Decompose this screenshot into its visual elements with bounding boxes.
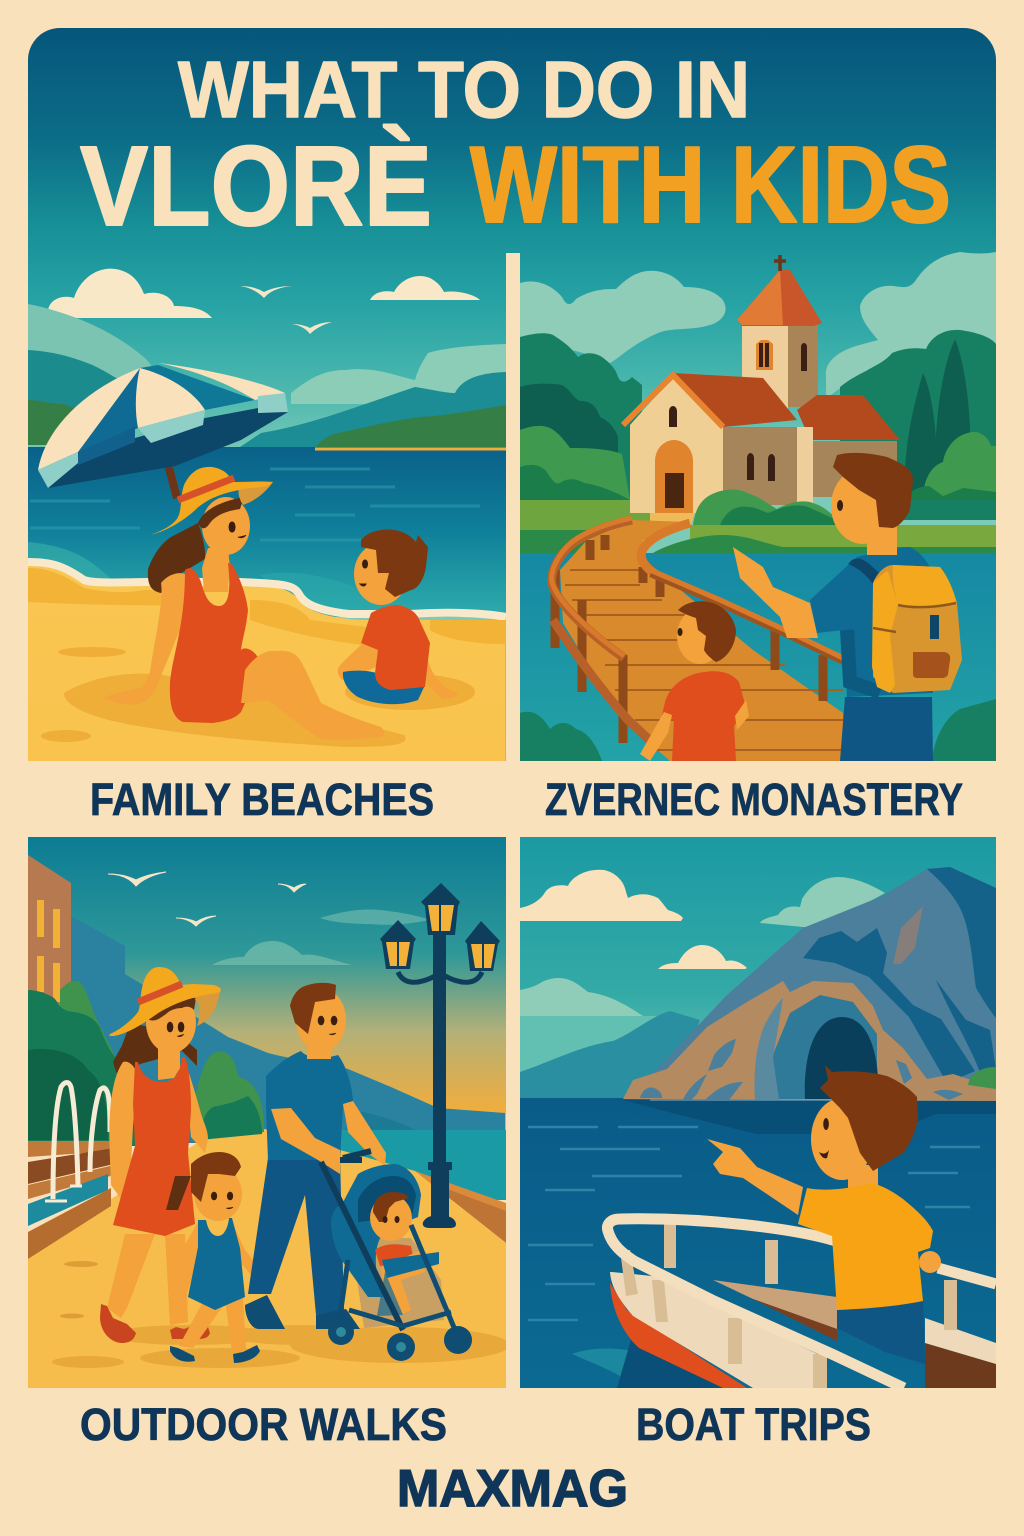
panel: zvernec monastery	[520, 252, 996, 761]
umbrella	[38, 363, 288, 498]
title	[80, 45, 951, 249]
monastery	[623, 255, 900, 527]
hills	[28, 304, 506, 448]
street lamp	[380, 883, 500, 1228]
trees	[520, 330, 996, 520]
mother	[103, 467, 384, 740]
label: family beaches: FAMILY BEACHES	[90, 774, 434, 825]
label: outdoor walks: OUTDOOR WALKS	[80, 1399, 447, 1450]
child	[338, 529, 458, 704]
child on bridge	[640, 601, 749, 761]
brand name: MAXMAG	[397, 1460, 628, 1518]
clouds and birds	[108, 872, 430, 965]
title: WITH KIDS	[470, 124, 951, 246]
father	[245, 983, 386, 1329]
sea	[520, 1098, 996, 1388]
water	[340, 1130, 506, 1200]
mountain with cave	[623, 867, 996, 1101]
mother walking	[100, 967, 221, 1343]
building	[28, 855, 71, 1013]
mountains	[71, 916, 505, 1143]
clouds and birds	[48, 269, 480, 334]
divider strip	[506, 253, 520, 761]
man with backpack	[733, 453, 962, 761]
boat	[608, 1219, 996, 1388]
header sky panel	[28, 28, 996, 761]
promenade	[28, 1129, 510, 1388]
stroller	[321, 1151, 472, 1361]
panel: boat trips	[520, 837, 996, 1388]
label: boat trips: BOAT TRIPS	[636, 1399, 871, 1450]
sea	[28, 447, 506, 617]
panel: outdoor walks	[28, 837, 510, 1388]
distant hill	[520, 1011, 700, 1098]
panel: family beaches	[28, 269, 506, 761]
sand and foam	[28, 562, 506, 761]
trees and fountain	[28, 981, 264, 1259]
boy pointing	[707, 1065, 941, 1364]
wooden bridge	[552, 518, 843, 761]
child walking	[170, 1152, 270, 1363]
ground and water	[520, 500, 996, 761]
foreground bushes	[520, 699, 996, 761]
title: WHAT TO DO IN	[178, 45, 750, 134]
title: VLORÈ	[80, 123, 432, 249]
clouds	[520, 870, 885, 1052]
bushes by church	[693, 490, 836, 525]
clouds	[520, 252, 996, 400]
